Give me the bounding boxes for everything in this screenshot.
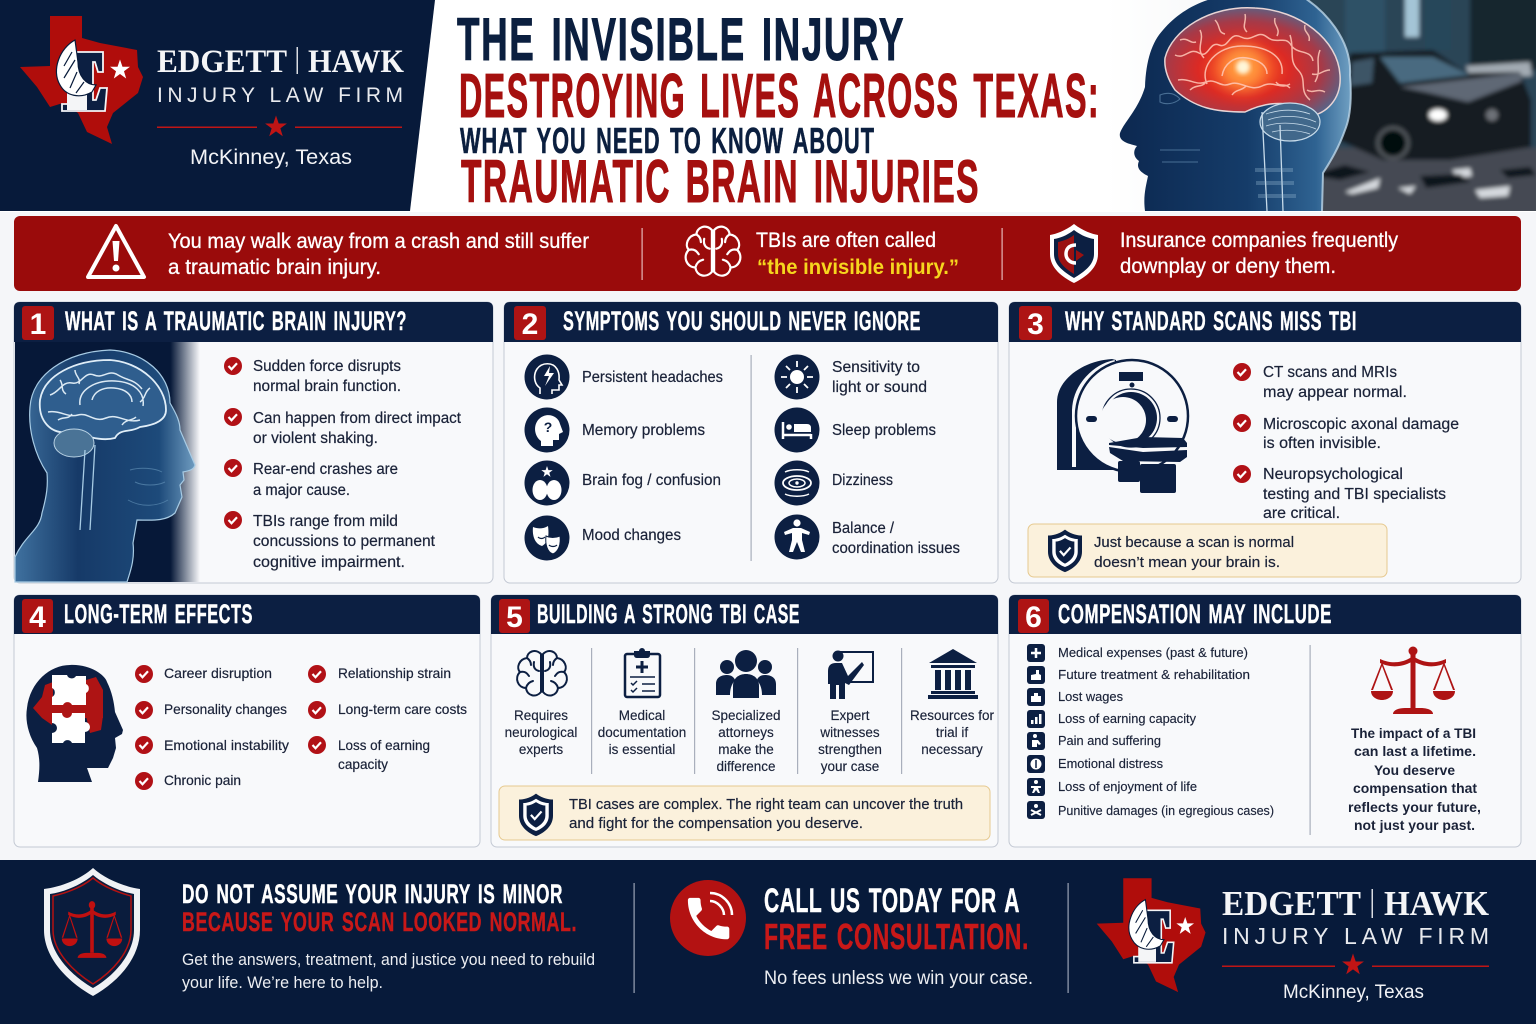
bullet list: concussions to permanent [253, 533, 436, 550]
compensation list: Loss of earning capacity [1058, 711, 1196, 726]
icon: balance figure [774, 514, 820, 560]
bullet list: left [135, 665, 289, 790]
bullet list: right: Loss of earning [338, 737, 430, 753]
heading bar: 2 [522, 308, 538, 341]
footer logo wordmark: EDGETT [1222, 884, 1361, 923]
footer logo: Texas mark [1097, 878, 1206, 992]
bullet list: right [308, 665, 467, 772]
symptom: mood changes: Mood changes [582, 527, 681, 544]
banner text: invisible injury [756, 229, 959, 279]
icon: memory: ? [544, 419, 552, 435]
bullet list: left: Personality changes [164, 701, 287, 717]
callout: the right team: TBI cases are complex. The right team can uncover the truth [569, 797, 963, 813]
banner text: invisible injury: TBIs are often called [756, 229, 936, 252]
bullet list: right: capacity [338, 756, 388, 772]
bullet list: Can happen from direct impact [253, 410, 462, 427]
logo wordmark: HAWK [308, 44, 404, 80]
symptom: brain fog: Brain fog / confusion [582, 472, 721, 489]
icon: warning triangle [88, 226, 144, 277]
column: neurological experts [505, 651, 577, 757]
title: TRAUMATIC BRAIN INJURIES [461, 148, 980, 215]
heading bar: BUILDING A STRONG TBI CASE [537, 599, 800, 629]
footer message: do not assume [182, 879, 595, 992]
symptom: sensitivity: Sensitivity to [832, 359, 920, 376]
panel 5: building a strong case [491, 595, 998, 847]
compensation list: Lost wages [1058, 689, 1123, 704]
column: neurological experts: neurological [505, 725, 577, 740]
icon: memory [524, 408, 570, 452]
logo wordmark: McKinney, Texas [190, 146, 352, 169]
heading bar [14, 595, 480, 634]
bullet list: may appear normal. [1263, 384, 1407, 401]
column: expert witnesses: strengthen [818, 742, 882, 757]
column: specialized attorneys [711, 650, 781, 774]
heading bar [1009, 302, 1521, 342]
bullet list: Neuropsychological [1263, 466, 1403, 483]
banner text: insurance [1120, 229, 1398, 278]
symptom: sensitivity [832, 359, 927, 396]
header photo: crash scene and glowing brain [1105, 0, 1536, 215]
icon: scales of justice [1371, 646, 1455, 714]
heading bar [14, 302, 493, 342]
bullet list: are critical. [1263, 505, 1340, 522]
bullet list: Rear-end crashes are [253, 461, 398, 478]
column: trial resources: trial if [936, 725, 968, 740]
footer logo wordmark: HAWK [1384, 884, 1489, 923]
footer logo wordmark: INJURY LAW FIRM [1222, 923, 1489, 949]
column: specialized attorneys: difference [716, 759, 776, 774]
bullet list: Microscopic axonal damage [1263, 416, 1459, 433]
compensation list: Future treatment & rehabilitation [1058, 667, 1250, 682]
title: THE INVISIBLE INJURY [457, 6, 905, 73]
callout: the right team [499, 786, 990, 840]
bullet list: right: Long-term care costs [338, 701, 467, 717]
banner text: walk away [168, 230, 589, 279]
bullet list: left: Emotional instability [164, 737, 289, 753]
bullet list: testing and TBI specialists [1263, 486, 1446, 503]
column: medical documentation [598, 648, 686, 757]
symptom: balance: coordination issues [832, 540, 960, 557]
column: trial resources: necessary [921, 742, 983, 757]
panel 1: what is a TBI [14, 302, 493, 583]
illustration: head x-ray [15, 342, 200, 582]
column: specialized attorneys: attorneys [718, 725, 774, 740]
logo wordmark: INJURY LAW FIRM [157, 84, 403, 107]
symptom: sleep: Sleep problems [832, 422, 936, 439]
impact statement: The impact of a TBI [1351, 725, 1476, 741]
callout: normal scan: doesn’t mean your brain is. [1094, 555, 1280, 571]
bullet list: or violent shaking. [253, 430, 378, 447]
footer logo wordmark: McKinney, Texas [1283, 982, 1424, 1003]
impact statement [1348, 725, 1481, 833]
column: neurological experts: Requires [514, 708, 568, 723]
header brand panel [0, 0, 435, 211]
compensation list: Loss of enjoyment of life [1058, 779, 1197, 794]
icon: brain fog [524, 460, 570, 506]
heading bar: LONG-TERM EFFECTS [64, 599, 253, 629]
title: WHAT YOU NEED TO KNOW ABOUT [460, 120, 875, 161]
symptom: sensitivity: light or sound [832, 379, 927, 396]
icon: sun [774, 354, 820, 400]
bullet list: left: Chronic pain [164, 772, 241, 788]
column: expert witnesses: your case [821, 759, 879, 774]
column: specialized attorneys: make the [718, 742, 774, 757]
bullet list: right: Relationship strain [338, 665, 451, 681]
heading bar: 6 [1025, 601, 1042, 634]
compensation list: Punitive damages (in egregious cases) [1058, 803, 1274, 818]
heading bar [504, 302, 998, 342]
icon: headache [524, 354, 570, 400]
heading bar: 5 [506, 601, 523, 634]
footer message: call today [764, 882, 1033, 989]
heading bar [1009, 595, 1521, 634]
heading bar: WHAT IS A TRAUMATIC BRAIN INJURY? [65, 306, 407, 336]
impact statement: You deserve [1374, 762, 1455, 778]
footer [0, 860, 1536, 1024]
footer logo wordmark [1222, 884, 1489, 1003]
heading bar: COMPENSATION MAY INCLUDE [1058, 599, 1332, 629]
column: expert witnesses: witnesses [819, 725, 880, 740]
heading bar: 1 [30, 308, 46, 341]
bullet list: is often invisible. [1263, 435, 1381, 452]
symptom: memory problems: Memory problems [582, 422, 705, 439]
icon: phone [670, 880, 746, 956]
bullet list: a major cause. [253, 482, 350, 499]
banner text: walk away: a traumatic brain injury. [168, 256, 381, 279]
impact statement: reflects your future, [1348, 799, 1481, 815]
bullet list: left: Career disruption [164, 665, 272, 681]
banner text: invisible injury: “the invisible injury.” [757, 256, 959, 279]
heading bar: WHY STANDARD SCANS MISS TBI [1065, 306, 1357, 336]
callout: normal scan: Just because a scan is normal [1094, 535, 1294, 551]
column: medical documentation: is essential [609, 742, 675, 757]
symptom: balance [832, 520, 960, 557]
symptom: dizziness: Dizziness [832, 472, 893, 489]
alert banner [14, 216, 1521, 291]
banner text: walk away: You may walk away from a crash and still suffer [168, 230, 589, 253]
column: medical documentation: documentation [598, 725, 686, 740]
bullet list [1233, 363, 1459, 522]
footer message: call today: No fees unless we win your case. [764, 968, 1033, 989]
icon: bed [774, 408, 820, 452]
footer message: call today: CALL US TODAY FOR A [764, 882, 1020, 920]
column: medical documentation: Medical [619, 708, 665, 723]
footer message: do not assume: your life. We’re here to help. [182, 973, 383, 992]
footer message: call today: FREE CONSULTATION. [764, 916, 1029, 957]
footer message: do not assume: Get the answers, treatment, and justice you need to rebuild [182, 950, 595, 969]
banner text: insurance: Insurance companies frequently [1120, 229, 1398, 252]
compensation list [1027, 644, 1274, 819]
bullet list: TBIs range from mild [253, 513, 398, 530]
column: trial resources: Resources for [910, 708, 995, 723]
panel 3: why scans miss TBI [1009, 302, 1521, 583]
column: specialized attorneys: Specialized [711, 708, 781, 723]
logo: Edgett Hawk Texas mark [20, 16, 143, 144]
panel 4: long-term effects [14, 595, 480, 847]
impact statement: can last a lifetime. [1354, 743, 1476, 759]
column: expert witnesses: Expert [830, 708, 870, 723]
column: neurological experts: experts [519, 742, 563, 757]
icon: CT scanner [1057, 359, 1188, 493]
banner text: insurance: downplay or deny them. [1120, 255, 1336, 278]
symptom: balance: Balance / [832, 520, 895, 537]
title [457, 6, 1100, 215]
bullet list: cognitive impairment. [253, 554, 405, 571]
icon: brain [686, 227, 740, 276]
icon: dizziness [774, 460, 820, 506]
callout: normal scan [1028, 524, 1387, 577]
impact statement: not just your past. [1354, 817, 1475, 833]
icon: shield with scales [44, 868, 140, 996]
compensation list: Medical expenses (past & future) [1058, 645, 1248, 660]
icon: head with puzzle pieces [26, 665, 123, 782]
impact statement: compensation that [1353, 780, 1477, 796]
heading bar [491, 595, 998, 634]
heading bar: 3 [1027, 308, 1044, 341]
compensation list: Pain and suffering [1058, 733, 1161, 748]
panel 2: symptoms [504, 302, 998, 583]
icon: shield [1050, 224, 1098, 283]
panel 6: compensation [1009, 595, 1521, 847]
column: trial resources [910, 649, 995, 757]
column: expert witnesses [818, 650, 882, 774]
symptom: persistent headaches: Persistent headaches [582, 369, 723, 386]
heading bar: 4 [29, 601, 46, 634]
footer message: do not assume: BECAUSE YOUR SCAN LOOKED NORMAL. [182, 907, 577, 937]
logo wordmark: EDGETT [157, 44, 287, 80]
bullet list: CT scans and MRIs [1263, 364, 1397, 381]
bullet list: Sudden force disrupts [253, 358, 401, 375]
logo wordmark [157, 44, 404, 169]
callout: the right team: and fight for the compensation you deserve. [569, 816, 863, 832]
bullet list: normal brain function. [253, 378, 401, 395]
icon: masks [524, 516, 570, 560]
compensation list: Emotional distress [1058, 756, 1163, 771]
bullet list [224, 357, 462, 571]
heading bar: SYMPTOMS YOU SHOULD NEVER IGNORE [563, 306, 921, 336]
footer message: do not assume: DO NOT ASSUME YOUR INJURY IS MINOR [182, 879, 563, 909]
